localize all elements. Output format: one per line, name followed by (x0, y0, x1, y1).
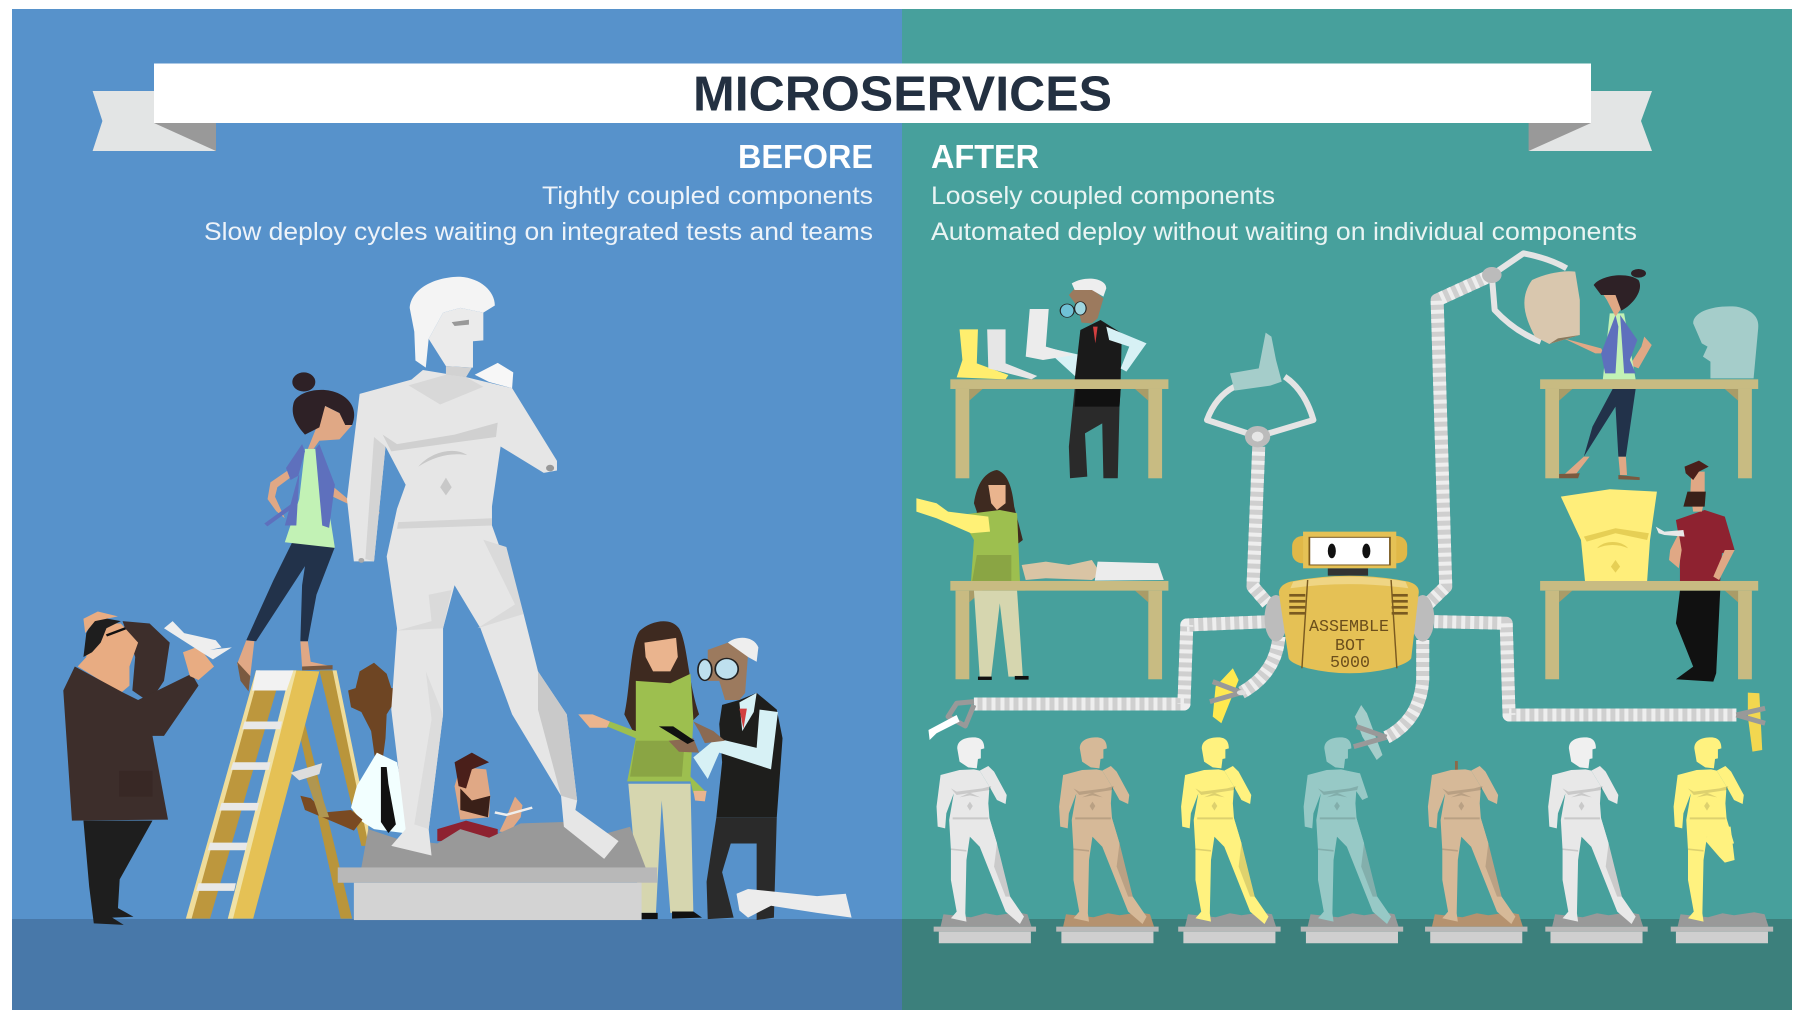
floor: before (12, 919, 902, 1010)
illustration: before scene (63, 277, 852, 925)
robot label: BOT: BOT (1335, 637, 1365, 656)
table lower-left slab (950, 581, 1168, 591)
woman holding arm (916, 470, 1164, 680)
statue 3: yellow (1178, 737, 1281, 943)
title banner (154, 64, 1591, 123)
floor: after (902, 919, 1792, 1010)
heading: before: BEFORE (738, 139, 873, 176)
bearded man with statue torso (1561, 461, 1735, 682)
text: after line 2: Automated deploy without waiting on individual components (931, 218, 1637, 246)
bearded man with wrench (437, 753, 532, 841)
robot arm to right claw (1434, 622, 1765, 752)
row of small statues (934, 737, 1773, 943)
robot arm to lower-left claw (928, 622, 1270, 740)
statue 2: tan (1056, 737, 1159, 943)
robot arm to yellow part (1210, 637, 1279, 723)
text: before line 2: Slow deploy cycles waiting on integrated tests and teams (204, 218, 873, 246)
man in dark jacket (63, 612, 232, 925)
statue feet on table (957, 309, 1075, 379)
ladder (186, 670, 368, 919)
statue 6: grey (1545, 737, 1648, 943)
robot AssembleBot (1265, 532, 1434, 673)
text: before line 1: Tightly coupled components (542, 182, 873, 210)
table top-right (1545, 389, 1752, 478)
large statue (347, 277, 619, 859)
man in lab coat with hammer (291, 663, 411, 834)
table lower-right slab (1540, 581, 1758, 591)
statue 4: teal, arm stump (1301, 737, 1403, 943)
table lower-right (1545, 591, 1752, 679)
statue 1: grey (934, 737, 1036, 943)
pedestal (338, 822, 657, 920)
statue 7: yellow, leg being attached (1671, 737, 1773, 943)
table lower-left (956, 591, 1162, 679)
panel: before background (12, 9, 902, 1010)
text: after line 1: Loosely coupled components (931, 182, 1275, 210)
statue 5: tan, headless (1425, 761, 1527, 943)
older man at table (1043, 279, 1147, 478)
woman on ladder (237, 372, 380, 691)
robot arm to top-right claw (1428, 253, 1567, 603)
table top-right slab (1540, 379, 1758, 389)
robot label: 5000: 5000 (1330, 654, 1370, 673)
robot arm to teal part (1354, 640, 1423, 760)
woman with statue head (1524, 269, 1758, 480)
table top-left (956, 389, 1162, 478)
ribbon right tail (1529, 91, 1652, 151)
woman in green hoodie (578, 621, 707, 919)
illustration: after scene (916, 253, 1765, 760)
older man with glasses (693, 638, 783, 920)
title: MICROSERVICES (693, 68, 1112, 122)
ribbon left tail (93, 91, 216, 151)
panel: after background (902, 9, 1792, 1010)
robot arm to top claw (1207, 333, 1313, 603)
heading: after: AFTER (931, 139, 1039, 176)
robot label: ASSEMBLE: ASSEMBLE (1309, 618, 1389, 637)
table top-left slab (950, 379, 1168, 389)
broken statue arm (737, 889, 852, 918)
